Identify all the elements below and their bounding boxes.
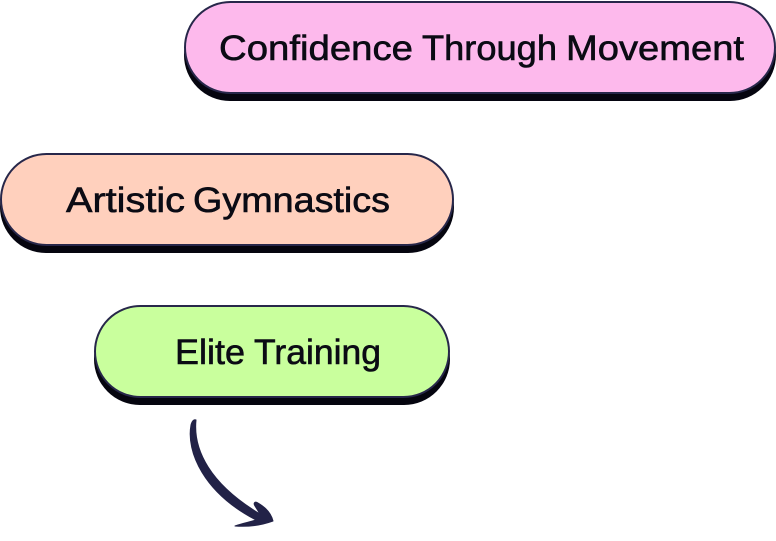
heading: Elite Training: Elite bbox=[175, 333, 245, 372]
heading: Confidence Through Movement bbox=[219, 29, 744, 68]
heading: Artistic Gymnastics: Gymnastics bbox=[193, 181, 390, 220]
heading: Confidence Through Movement: Movement bbox=[566, 29, 744, 68]
heading: Confidence Through Movement: Confidence bbox=[219, 29, 413, 68]
arrow: curved arrow pointing down-right bbox=[190, 420, 273, 526]
panel: Elite Training pill bbox=[94, 306, 450, 405]
heading: Elite Training bbox=[175, 333, 381, 372]
heading: Artistic Gymnastics bbox=[66, 181, 390, 220]
heading: Artistic Gymnastics: Artistic bbox=[66, 181, 185, 220]
panel: Confidence Through Movement pill bbox=[184, 2, 776, 101]
panel: Artistic Gymnastics pill bbox=[0, 154, 454, 253]
heading: Confidence Through Movement: Through bbox=[422, 29, 557, 68]
heading: Elite Training: Training bbox=[254, 333, 381, 372]
